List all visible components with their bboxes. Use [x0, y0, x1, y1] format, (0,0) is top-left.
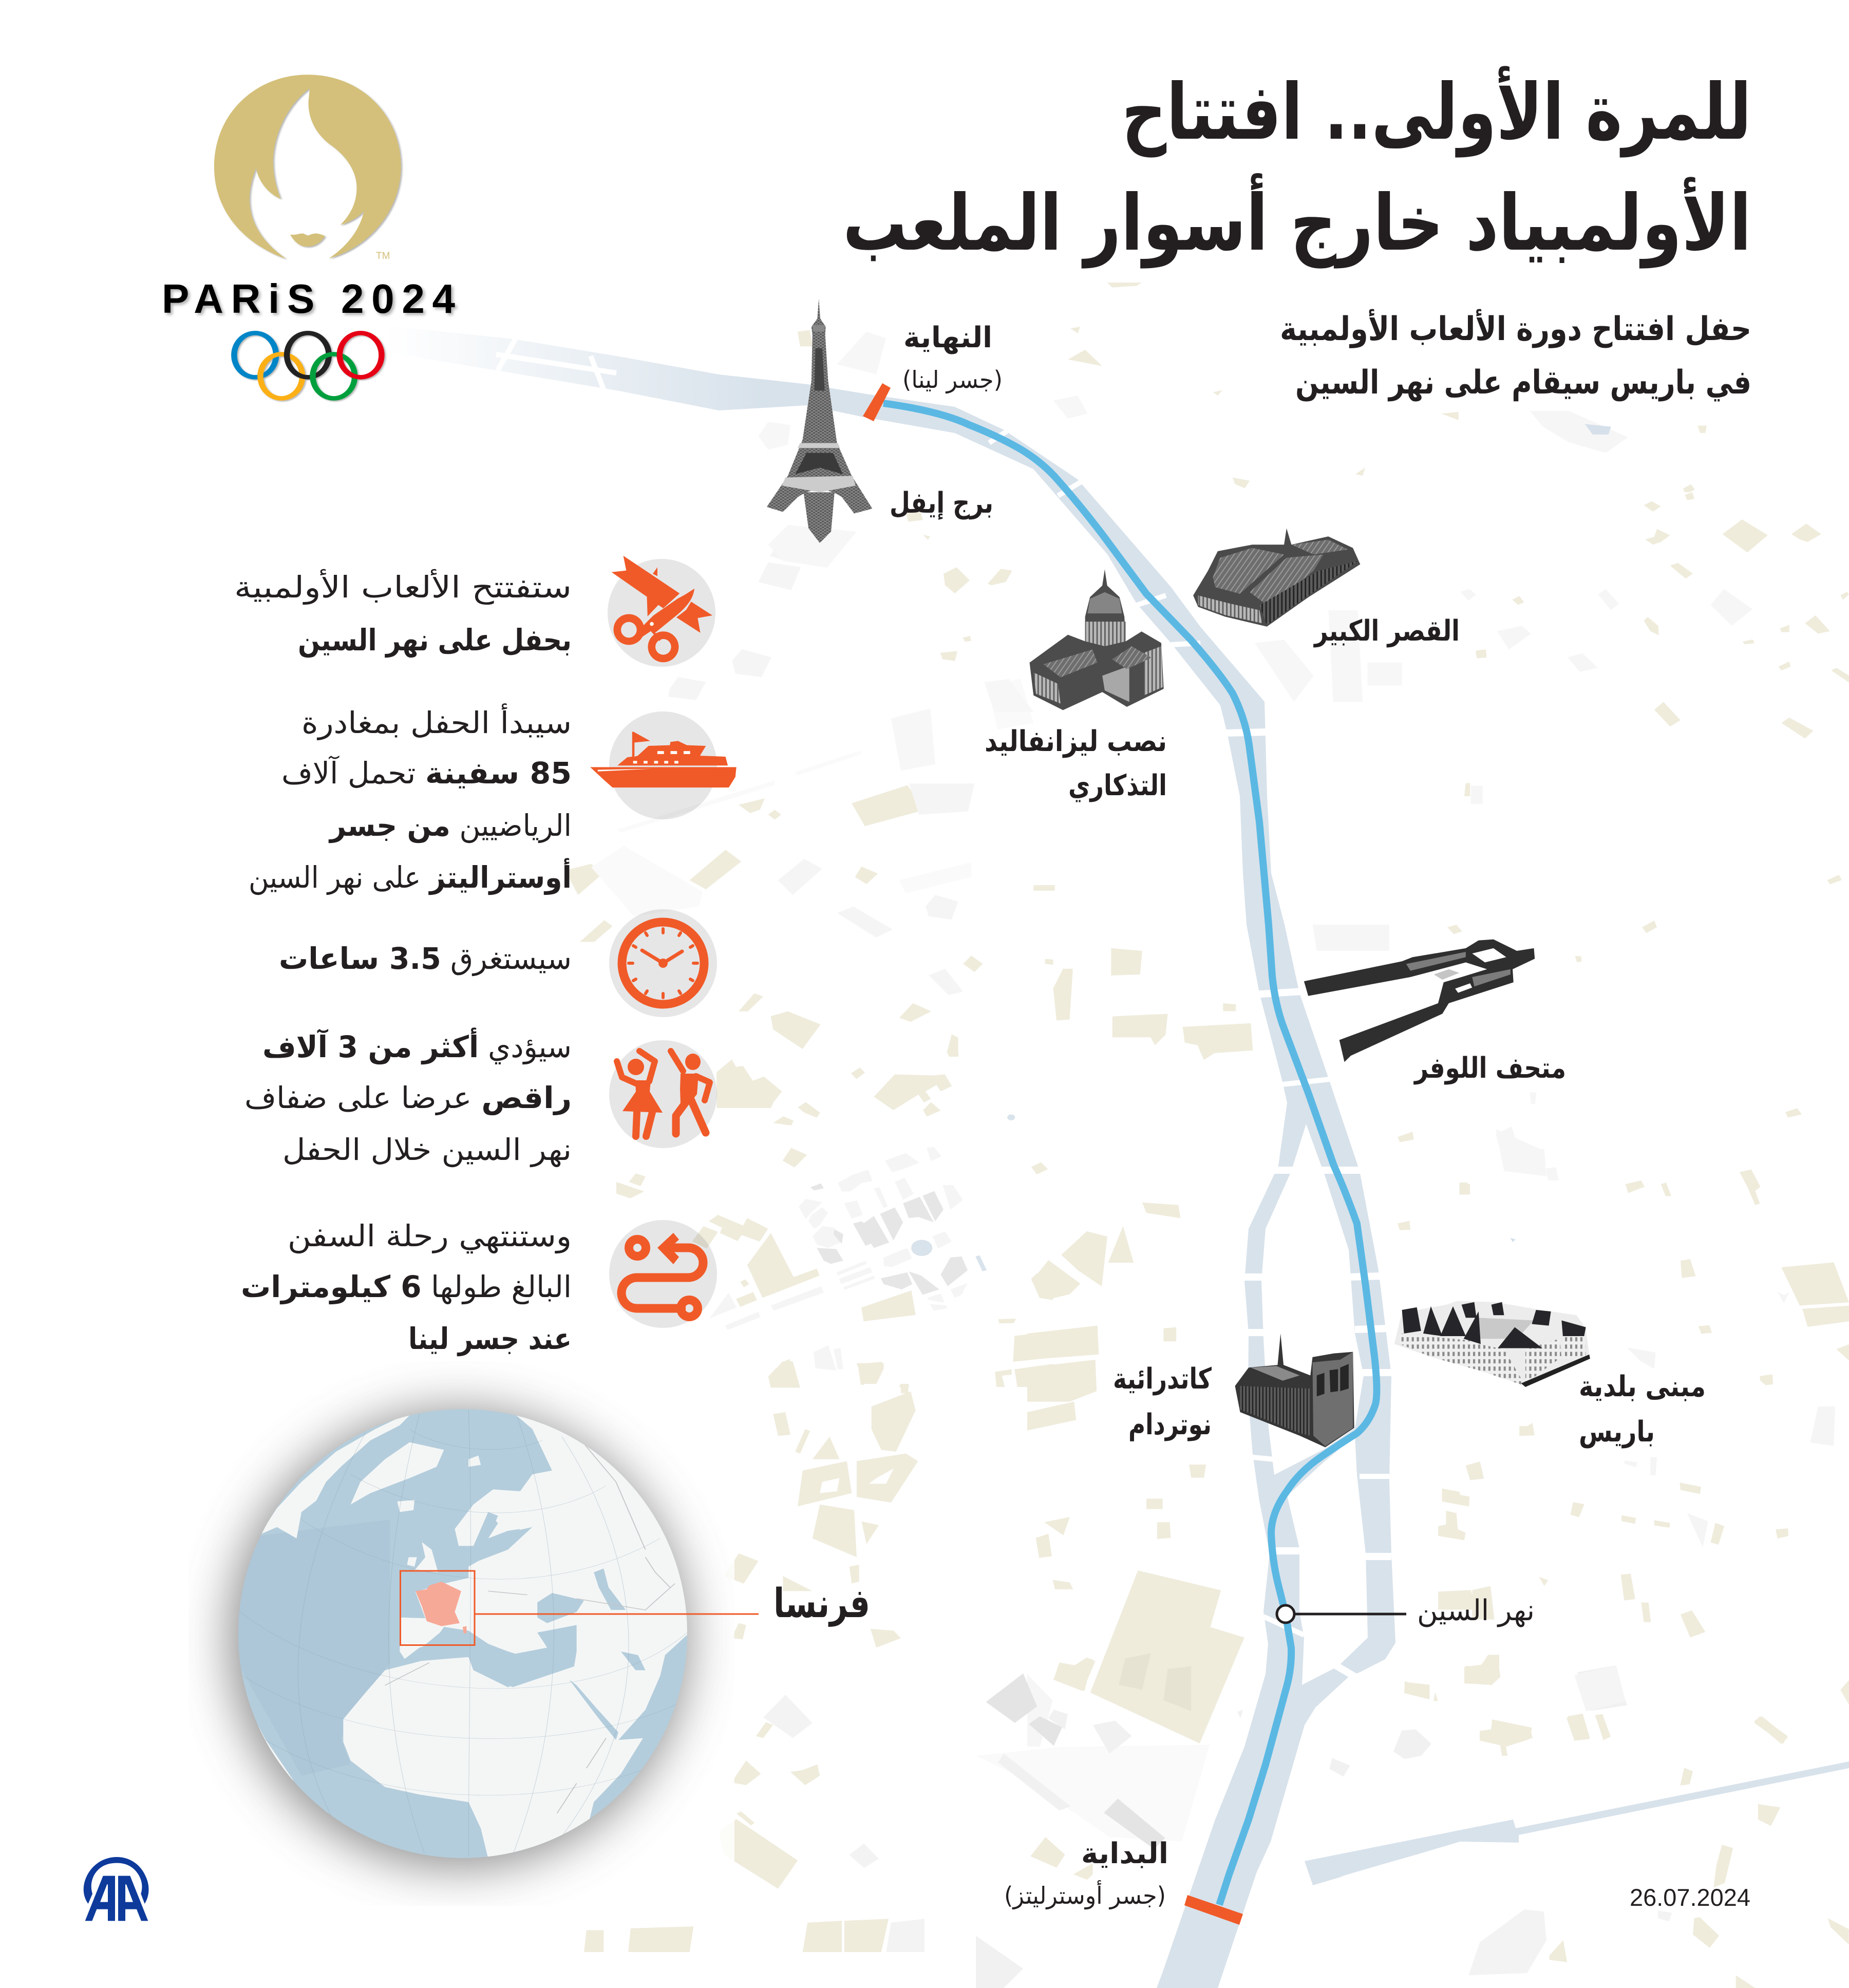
- text: item 5: البالغ طولها 6 كيلومترات: [241, 1269, 572, 1305]
- locator box and leader: [401, 1571, 759, 1645]
- route line on the Seine: [883, 403, 1376, 1905]
- date: 26.07.2024: [1630, 1884, 1750, 1911]
- oceans shading: [238, 1520, 390, 1776]
- text: item 4: نهر السين خلال الحفل: [282, 1132, 572, 1168]
- label: start: [1004, 1837, 1168, 1910]
- text: item 1: بحفل على نهر السين: [298, 623, 572, 658]
- text: item 3: سيستغرق 3.5 ساعات: [279, 941, 572, 977]
- label: end: (جسر لينا): [902, 366, 1003, 394]
- land: [255, 1410, 481, 1781]
- label: start: (جسر أوسترليتز): [1004, 1880, 1166, 1910]
- icon: Louvre Museum: [1304, 940, 1535, 1062]
- callout: Seine river: [1277, 1594, 1535, 1627]
- text: item 5: وستنتهي رحلة السفن: [288, 1218, 572, 1254]
- text: item 1: [234, 569, 572, 658]
- label: France: فرنسا: [773, 1581, 870, 1627]
- text: item 4: راقص عرضا على ضفاف: [244, 1080, 572, 1116]
- label: Louvre: متحف اللوفر: [1413, 1052, 1566, 1085]
- text: item 5: عند جسر لينا: [408, 1321, 572, 1357]
- icon: Eiffel Tower: [767, 299, 872, 543]
- text: item 2: سيبدأ الحفل بمغادرة: [301, 703, 572, 740]
- France: [416, 1582, 461, 1626]
- icon: Invalides monument: [1030, 569, 1164, 710]
- seas: [478, 1512, 520, 1561]
- label: Eiffel Tower: برج إيفل: [890, 486, 993, 520]
- icon: clock: [609, 909, 717, 1017]
- subtitle: في باريس سيقام على نهر السين: [1295, 364, 1751, 402]
- text: item 4: [244, 1027, 572, 1168]
- emblem: [214, 74, 401, 259]
- icon: Grand Palais: [1193, 528, 1360, 627]
- islands: [1261, 1124, 1364, 1475]
- sphere: [236, 1399, 694, 1860]
- text: item 1: ستفتتح الألعاب الأولمبية: [234, 569, 572, 605]
- logo: Anadolu Agency: [84, 1857, 148, 1921]
- text: item 2: الرياضيين من جسر: [328, 808, 572, 843]
- logo: Paris 2024: [162, 74, 455, 398]
- label: Invalides: [985, 725, 1167, 802]
- title: [843, 66, 1751, 269]
- text: item 2: أوستراليتز على نهر السين: [249, 858, 572, 895]
- text: item 4: سيؤدي أكثر من 3 آلاف: [262, 1027, 572, 1065]
- text: item 2: 85 سفينة تحمل آلاف: [281, 755, 572, 791]
- label: Invalides: نصب ليزانفاليد: [985, 725, 1167, 758]
- icon: scissors cutting ribbon: [608, 556, 715, 667]
- label: end: النهاية: [903, 321, 992, 354]
- label: Notre-Dame: نوتردام: [1128, 1408, 1212, 1441]
- wordmark: PARiS 2024: [162, 276, 455, 322]
- subtitle: حفل افتتاح دورة الألعاب الأولمبية: [1280, 309, 1751, 348]
- river Seine: [381, 325, 1849, 1988]
- label: Notre-Dame: كاتدرائية: [1113, 1362, 1212, 1396]
- text: item 5: [241, 1218, 572, 1357]
- label: Invalides: التذكاري: [1068, 769, 1167, 802]
- canal: [1305, 1761, 1849, 1885]
- trademark: TM: [376, 251, 390, 261]
- text: item 2: [249, 703, 572, 895]
- label: City Hall: [1579, 1370, 1706, 1449]
- olympic rings: [234, 333, 382, 398]
- icon: ship: [590, 711, 737, 819]
- icon: Paris City Hall: [1394, 1301, 1590, 1387]
- globe shadow: [188, 1361, 734, 1906]
- start marker: Austerlitz bridge: [1184, 1895, 1243, 1925]
- callout: Seine river: نهر السين: [1417, 1594, 1535, 1627]
- globe with France highlighted: [188, 1361, 870, 1906]
- label: City Hall: باريس: [1579, 1415, 1655, 1449]
- subtitle: [1280, 309, 1751, 402]
- graticule: [238, 1410, 687, 1856]
- background map: city buildings: [565, 283, 1849, 1988]
- icon: dancers: [609, 1040, 717, 1148]
- icon: route: [609, 1220, 717, 1328]
- mountains: [385, 1429, 675, 1813]
- icon: Notre-Dame Cathedral: [1235, 1334, 1354, 1447]
- label: start: البداية: [1081, 1837, 1168, 1870]
- end marker: Iena bridge: [863, 383, 891, 421]
- label: Notre-Dame: [1113, 1362, 1212, 1441]
- label: end: [902, 321, 1003, 394]
- label: City Hall: مبنى بلدية: [1579, 1370, 1706, 1403]
- label: Grand Palais: القصر الكبير: [1313, 614, 1460, 648]
